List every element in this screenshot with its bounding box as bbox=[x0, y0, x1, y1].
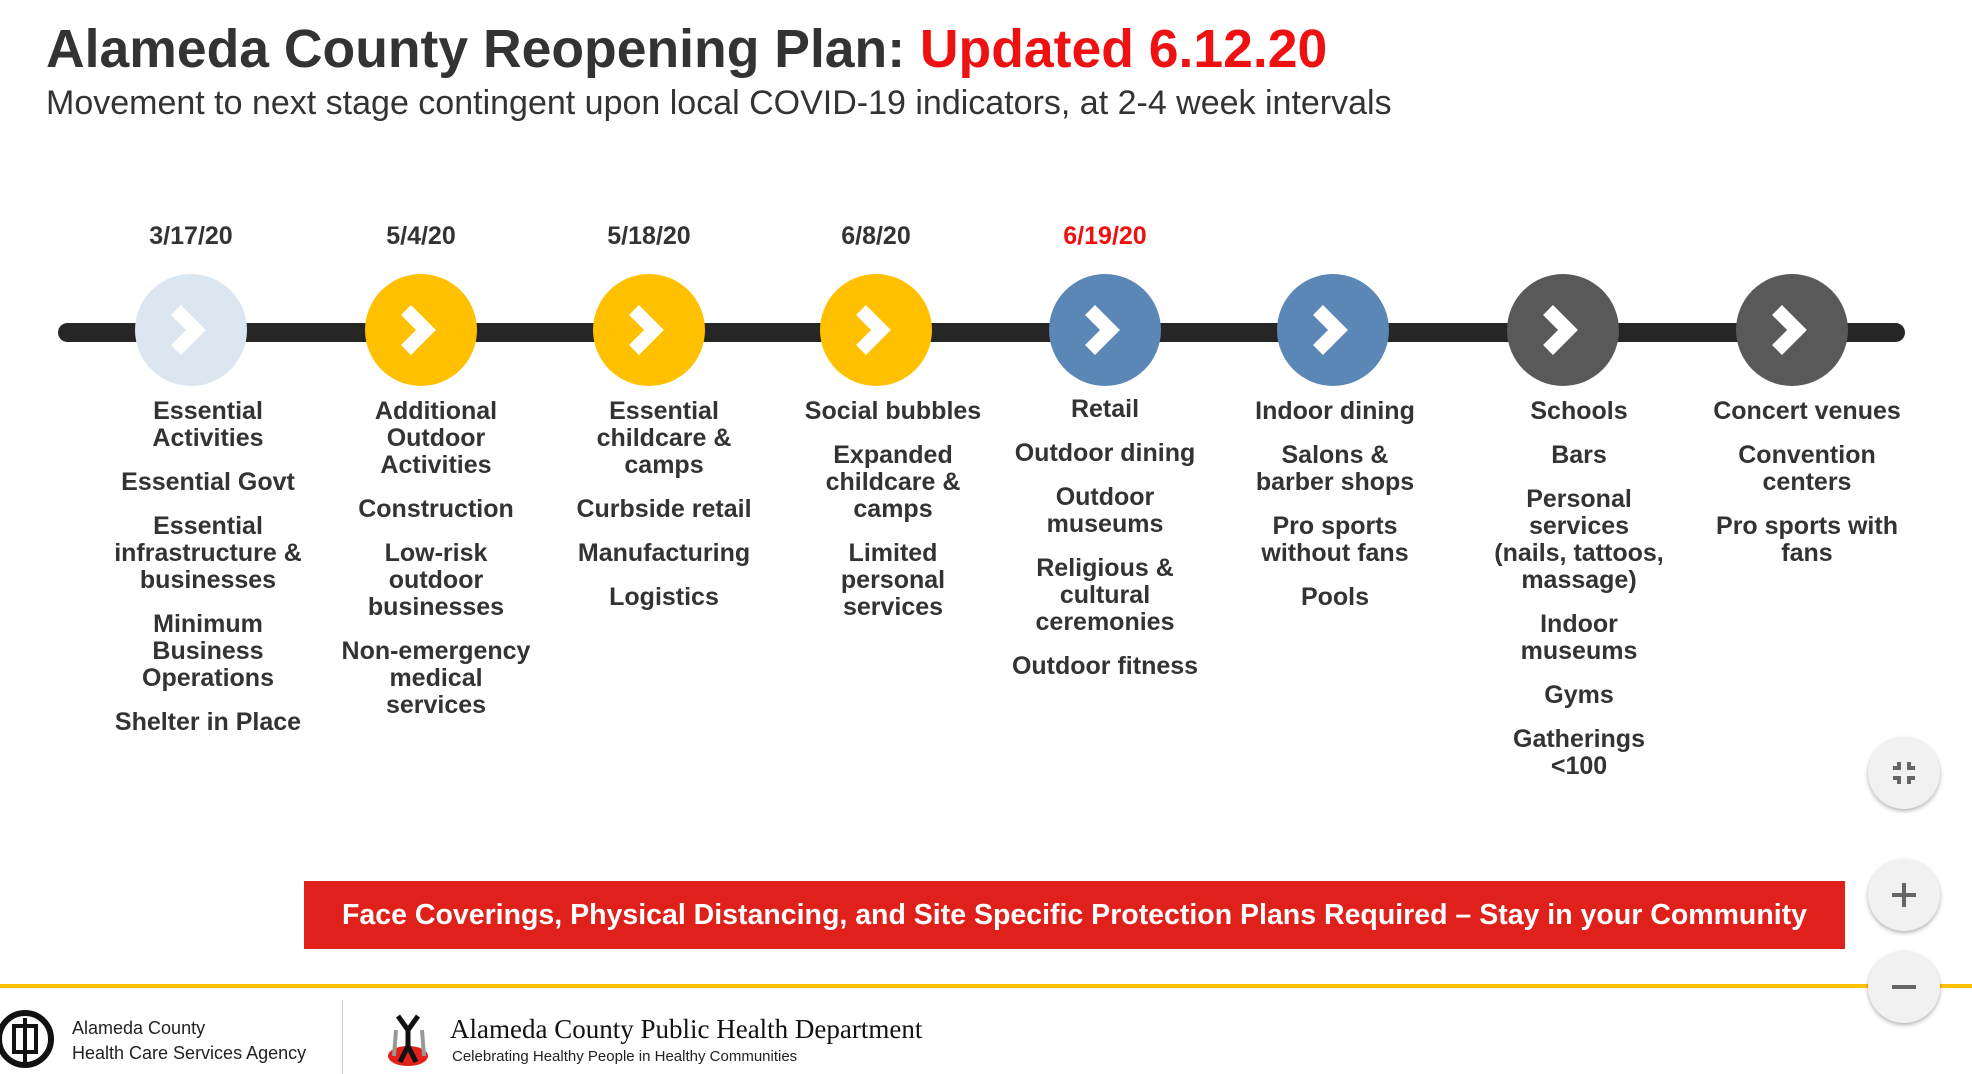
column: stage 2: Additional bbox=[375, 397, 497, 425]
dates: 6/8/20 bbox=[841, 222, 911, 250]
column: stage 2: services bbox=[386, 691, 486, 719]
icon: agency seal bbox=[0, 1010, 54, 1068]
column: stage 2: Non-emergency bbox=[342, 637, 530, 665]
column: stage 7: <100 bbox=[1551, 752, 1607, 780]
button: collapse bbox=[1868, 737, 1940, 809]
icon: people bbox=[388, 1014, 428, 1066]
footer right logo: Celebrating Healthy People in Healthy Communities bbox=[452, 1048, 797, 1065]
footer right logo: Alameda County Public Health Department bbox=[450, 1014, 922, 1044]
column: stage 2: Activities bbox=[380, 451, 492, 479]
column: stage 4: camps bbox=[853, 495, 933, 523]
column: stage 2: Low-risk bbox=[385, 539, 487, 567]
column: stage 7: massage) bbox=[1521, 566, 1637, 594]
column: stage 7: Gatherings bbox=[1513, 725, 1645, 753]
column: stage 8: fans bbox=[1781, 539, 1833, 567]
dates: 6/19/20 bbox=[1063, 222, 1147, 250]
subtitle: Movement to next stage contingent upon local COVID-19 indicators, at 2-4 week intervals bbox=[46, 84, 1392, 122]
footer left logo bbox=[0, 1010, 306, 1068]
yellow footer line bbox=[0, 984, 1972, 988]
column: stage 4: personal bbox=[841, 566, 945, 594]
column: stage 1: infrastructure & bbox=[114, 539, 302, 567]
column: stage 7: (nails, tattoos, bbox=[1494, 539, 1664, 567]
column: stage 4: childcare & bbox=[826, 468, 960, 496]
column: stage 1: Essential bbox=[153, 397, 263, 425]
column: stage 1: Activities bbox=[152, 424, 264, 452]
dates: 5/18/20 bbox=[607, 222, 691, 250]
column: stage 7 bbox=[1494, 397, 1664, 780]
dates: 3/17/20 bbox=[149, 222, 233, 250]
footer left logo: Health Care Services Agency bbox=[72, 1043, 306, 1063]
dates bbox=[149, 222, 1147, 250]
column: stage 4: Limited bbox=[849, 539, 937, 567]
column: stage 5: Retail bbox=[1071, 395, 1139, 423]
title: Alameda County Reopening Plan: Updated 6.12.20 bbox=[46, 20, 1327, 79]
red banner bbox=[304, 881, 1845, 949]
column: stage 5: cultural bbox=[1060, 581, 1150, 609]
button: zoom out bbox=[1868, 951, 1940, 1023]
footer right logo bbox=[388, 1014, 922, 1066]
column: stage 2 bbox=[342, 397, 530, 719]
column: stage 7: museums bbox=[1521, 637, 1637, 665]
column: stage 5: ceremonies bbox=[1036, 608, 1174, 636]
column: stage 5: museums bbox=[1047, 510, 1163, 538]
column: stage 1: Essential bbox=[153, 512, 263, 540]
stage circles bbox=[135, 274, 1848, 386]
column: stage 3: Curbside retail bbox=[576, 495, 752, 523]
column: stage 5 bbox=[1012, 395, 1198, 680]
column: stage 5: Outdoor bbox=[1056, 483, 1154, 511]
footer divider bbox=[342, 1000, 343, 1074]
column: stage 1 bbox=[114, 397, 302, 736]
column: stage 1: Shelter in Place bbox=[115, 708, 301, 736]
dates: 5/4/20 bbox=[386, 222, 456, 250]
column: stage 6: Indoor dining bbox=[1255, 397, 1415, 425]
column: stage 7: Indoor bbox=[1540, 610, 1618, 638]
button: zoom in bbox=[1868, 859, 1940, 931]
column: stage 8: Pro sports with bbox=[1716, 512, 1898, 540]
column: stage 1: Essential Govt bbox=[121, 468, 295, 496]
column: stage 8 bbox=[1713, 397, 1901, 567]
column: stage 6: Salons & bbox=[1282, 441, 1388, 469]
column: stage 1: Minimum bbox=[153, 610, 263, 638]
column: stage 2: Construction bbox=[358, 495, 514, 523]
column: stage 3: Logistics bbox=[609, 583, 719, 611]
column: stage 5: Religious & bbox=[1036, 554, 1174, 582]
column: stage 3: Manufacturing bbox=[578, 539, 750, 567]
column: stage 6: Pools bbox=[1301, 583, 1369, 611]
column: stage 8: Concert venues bbox=[1713, 397, 1901, 425]
column: stage 1: Operations bbox=[142, 664, 274, 692]
column: stage 7: Personal bbox=[1526, 485, 1632, 513]
column: stage 5: Outdoor dining bbox=[1015, 439, 1195, 467]
column: stage 6 bbox=[1255, 397, 1415, 611]
column: stage 7: Bars bbox=[1551, 441, 1607, 469]
column: stage 6: Pro sports bbox=[1272, 512, 1398, 540]
column: stage 4: services bbox=[843, 593, 943, 621]
column: stage 4: Expanded bbox=[833, 441, 953, 469]
column: stage 4 bbox=[805, 397, 981, 621]
column: stage 3: camps bbox=[624, 451, 704, 479]
column: stage 4: Social bubbles bbox=[805, 397, 981, 425]
column: stage 8: Convention bbox=[1738, 441, 1876, 469]
footer left logo: Alameda County bbox=[72, 1018, 205, 1038]
column: stage 2: businesses bbox=[368, 593, 504, 621]
column: stage 3: Essential bbox=[609, 397, 719, 425]
column: stage 1: Business bbox=[152, 637, 264, 665]
column: stage 5: Outdoor fitness bbox=[1012, 652, 1198, 680]
column: stage 3: childcare & bbox=[597, 424, 731, 452]
column: stage 8: centers bbox=[1763, 468, 1851, 496]
column: stage 2: Outdoor bbox=[387, 424, 485, 452]
column: stage 7: Schools bbox=[1530, 397, 1628, 425]
column: stage 3 bbox=[576, 397, 752, 611]
column: stage 6: barber shops bbox=[1256, 468, 1414, 496]
column: stage 1: businesses bbox=[140, 566, 276, 594]
red banner: Face Coverings, Physical Distancing, and Site Specific Protection Plans Required – Stay in your Community bbox=[342, 899, 1807, 931]
column: stage 7: Gyms bbox=[1544, 681, 1614, 709]
column: stage 6: without fans bbox=[1261, 539, 1409, 567]
column: stage 7: services bbox=[1529, 512, 1629, 540]
column: stage 2: medical bbox=[389, 664, 483, 692]
column: stage 2: outdoor bbox=[389, 566, 483, 594]
timeline line bbox=[58, 323, 1905, 342]
